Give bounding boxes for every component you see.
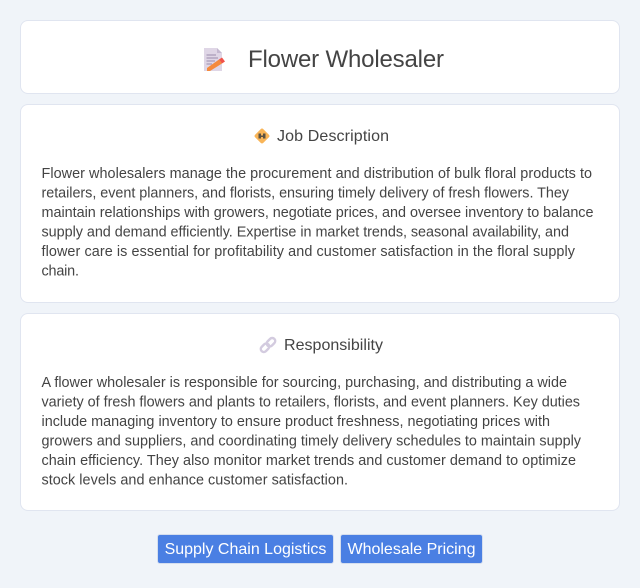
text block: responsibility: stock levels and enhance customer satisfaction.: [42, 472, 348, 488]
text block: responsibility: [42, 375, 582, 488]
heading: job description: Job Description: [277, 128, 389, 145]
tag: supply chain logistics: [157, 534, 334, 564]
tag: wholesale pricing: [340, 534, 483, 564]
tag: wholesale pricing: Wholesale Pricing: [347, 541, 476, 558]
tag: supply chain logistics: Supply Chain Logistics: [165, 541, 326, 558]
title: Flower Wholesaler: [248, 46, 444, 73]
icon: memo with pencil: [204, 48, 225, 71]
panel: job description: [20, 104, 620, 303]
icon: job description diamond: [254, 128, 270, 144]
panel: responsibility: [20, 313, 620, 511]
text block: job description: supply and demand efficiently. Expertise in market trends, seasonal availability, and: [42, 224, 569, 240]
heading: responsibility: Responsibility: [284, 337, 383, 354]
text block: job description: maintain relationships with growers, negotiate prices, and oversee inventory to balance: [42, 205, 594, 221]
panel: title card: [20, 20, 620, 94]
icon: link: [260, 336, 276, 354]
text block: responsibility: variety of fresh flowers and plants to retailers, florists, and event planners. Key duties: [42, 394, 580, 410]
text block: job description: flower care is essential for profitability and customer satisfaction in the floral supply: [42, 244, 576, 260]
text block: responsibility: include managing inventory to ensure product freshness, negotiating prices with: [42, 414, 550, 430]
text block: job description: [42, 166, 594, 280]
text block: responsibility: growers and suppliers, and coordinating timely delivery schedules to maintain supply: [42, 434, 582, 450]
text block: job description: chain.: [42, 264, 79, 280]
text block: responsibility: A flower wholesaler is responsible for sourcing, purchasing, and distributing a wide: [42, 375, 567, 391]
text block: job description: Flower wholesalers manage the procurement and distribution of bulk floral products to: [42, 166, 592, 182]
text block: job description: retailers, event planners, and florists, ensuring timely delivery of fresh flowers. They: [42, 186, 570, 202]
text block: responsibility: chain efficiency. They also monitor market trends and customer demand to optimize: [42, 453, 576, 469]
